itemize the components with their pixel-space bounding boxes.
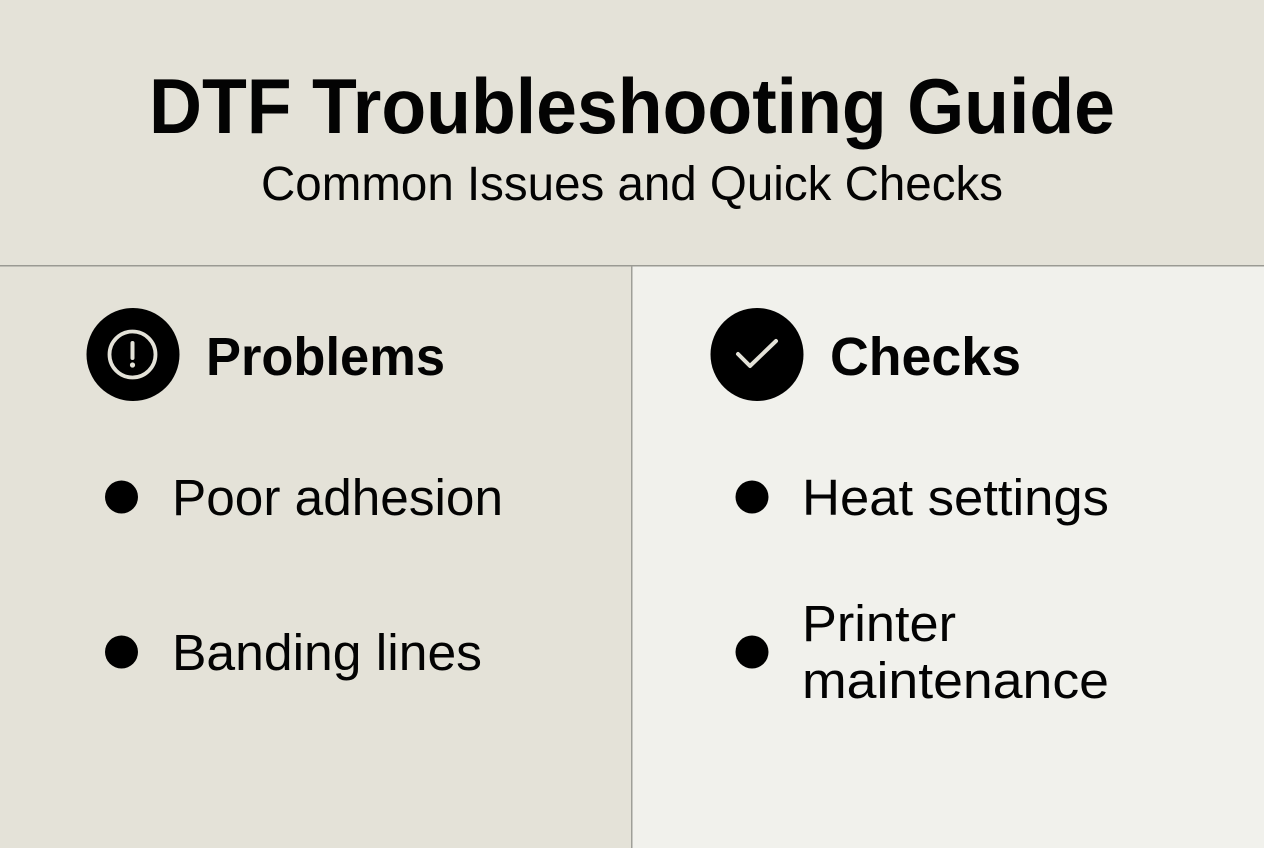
panel: checks — [632, 266, 1264, 848]
list item: banding lines: Banding lines — [172, 624, 482, 681]
list item: printer maintenance: Printer — [802, 595, 956, 652]
list item: heat settings: Heat settings — [802, 469, 1109, 526]
icon: exclamation in circle — [86, 308, 180, 401]
title: DTF Troubleshooting Guide — [149, 62, 1115, 150]
list item: printer maintenance — [736, 595, 1109, 709]
heading: checks: Checks — [830, 327, 1021, 387]
heading: problems: Problems — [206, 327, 445, 387]
panel: problems — [0, 266, 632, 848]
subtitle: Common Issues and Quick Checks — [261, 158, 1003, 211]
icon: check mark — [710, 308, 804, 401]
list item: printer maintenance: maintenance — [802, 652, 1109, 709]
list item: poor adhesion: Poor adhesion — [172, 469, 503, 526]
